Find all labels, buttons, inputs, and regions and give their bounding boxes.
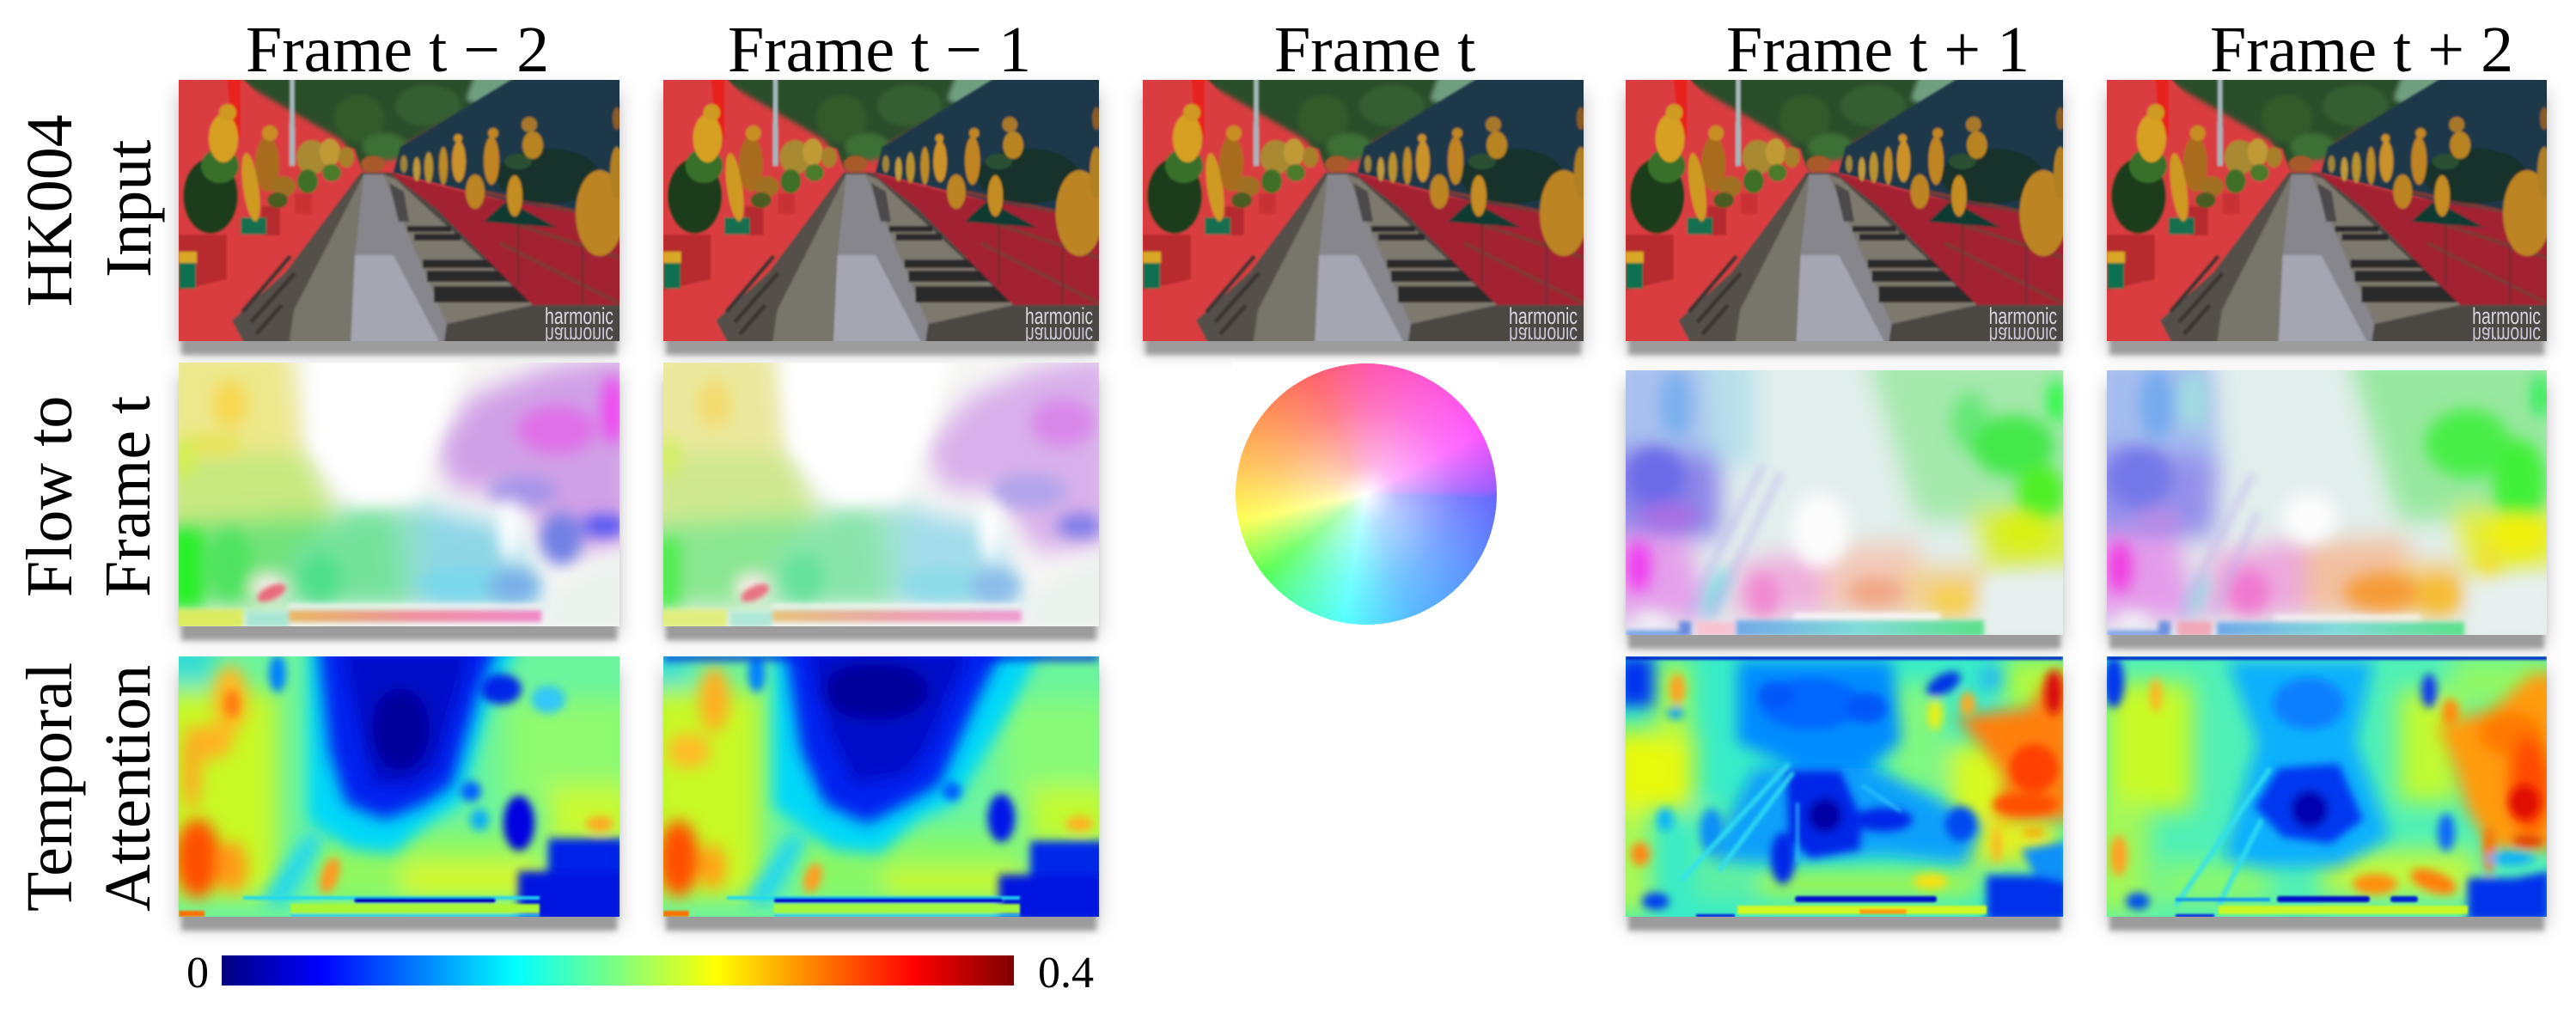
row label: Attention: Attention bbox=[92, 665, 164, 912]
attention heatmap: frame t-2 bbox=[179, 656, 620, 917]
input photo: frame t+1 bbox=[1626, 80, 2063, 341]
heading: Frame t − 1: Frame t − 1 bbox=[728, 14, 1031, 86]
row label: Frame t: Frame t bbox=[92, 396, 164, 597]
input photo: frame t bbox=[1143, 80, 1584, 341]
colorbar label: 0: 0 bbox=[186, 949, 209, 998]
colorbar legend bbox=[222, 955, 1014, 986]
heading: Frame t + 2: Frame t + 2 bbox=[2210, 14, 2513, 86]
row label: Temporal: Temporal bbox=[14, 662, 86, 912]
input photo: frame t+2 bbox=[2107, 80, 2547, 341]
colorbar label: 0.4: 0.4 bbox=[1038, 949, 1094, 998]
optical flow: frame t+2 bbox=[2107, 370, 2547, 635]
attention heatmap: frame t+1 bbox=[1626, 656, 2063, 917]
attention heatmap: frame t-1 bbox=[663, 656, 1099, 917]
optical flow: frame t-1 bbox=[663, 363, 1099, 626]
input photo: frame t-2 bbox=[179, 80, 620, 341]
heading: Frame t: Frame t bbox=[1274, 14, 1475, 86]
row label: HK004: HK004 bbox=[14, 114, 86, 307]
color wheel legend bbox=[1232, 363, 1499, 629]
optical flow: frame t-2 bbox=[179, 363, 620, 626]
input photo: frame t-1 bbox=[663, 80, 1099, 341]
row label: Input: Input bbox=[93, 140, 165, 278]
optical flow: frame t+1 bbox=[1626, 370, 2063, 635]
attention heatmap: frame t+2 bbox=[2107, 656, 2547, 917]
heading: Frame t − 2: Frame t − 2 bbox=[246, 14, 549, 86]
row label: Flow to: Flow to bbox=[14, 396, 86, 597]
heading: Frame t + 1: Frame t + 1 bbox=[1726, 14, 2030, 86]
